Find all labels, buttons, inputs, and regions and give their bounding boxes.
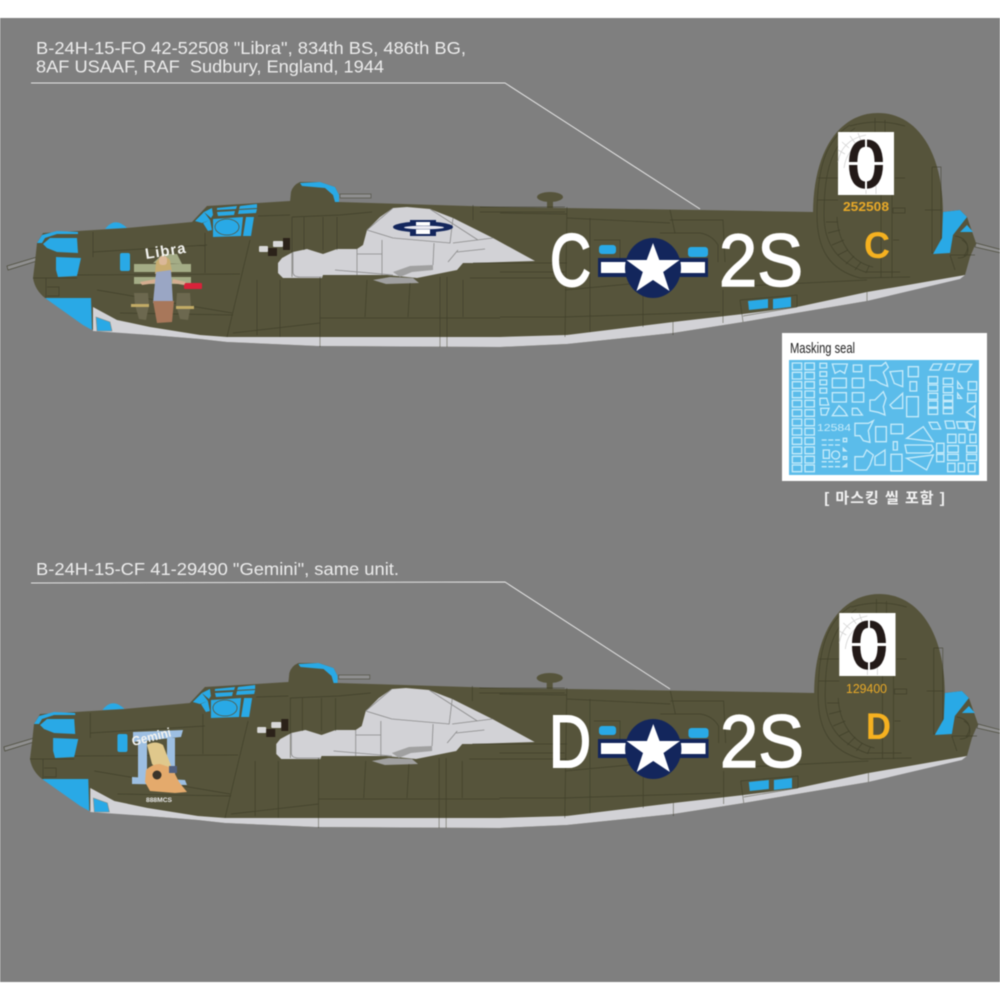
heading: Libra scheme: 8AF USAAF, RAF Sudbury, England, 1944 bbox=[36, 56, 384, 76]
leader line: Libra bbox=[31, 83, 700, 209]
wing insignia bbox=[393, 220, 453, 236]
aircraft: Libra B-24H bbox=[7, 113, 1000, 347]
masking seal title: Masking seal bbox=[790, 340, 855, 357]
masking seal shapes bbox=[792, 362, 977, 472]
tail letter D: D bbox=[866, 706, 891, 747]
aircraft: Gemini B-24H bbox=[4, 594, 1000, 828]
masking seal serial: 12584 bbox=[817, 423, 852, 434]
tail serial: 129400 bbox=[846, 681, 887, 696]
nose art: Gemini bbox=[132, 730, 187, 793]
nose art title: Libra: Libra bbox=[144, 240, 188, 263]
nose art title: Gemini: Gemini bbox=[130, 725, 173, 749]
tail letter C: C bbox=[864, 225, 890, 266]
heading: Gemini scheme: B-24H-15-CF 41-29490 "Gemini", same unit. bbox=[36, 559, 399, 579]
fuselage code 2S: 2S bbox=[719, 219, 803, 302]
tail number 0: 0 bbox=[848, 127, 884, 201]
caption: masking seal included: [ 마스킹 씰 포함 ] bbox=[824, 490, 946, 507]
fuselage code D: D bbox=[549, 700, 591, 783]
tail number 0: 0 bbox=[851, 608, 887, 682]
nose art: Libra bbox=[131, 254, 202, 323]
fuselage code 2S: 2S bbox=[720, 700, 804, 783]
tail serial: 252508 bbox=[843, 199, 889, 214]
heading: Libra scheme bbox=[36, 38, 466, 76]
heading: Libra scheme: B-24H-15-FO 42-52508 "Libra", 834th BS, 486th BG, bbox=[36, 38, 466, 58]
fuselage code C: C bbox=[550, 219, 591, 302]
masking seal panel bbox=[782, 333, 987, 481]
nose art squadron tag: 888MCS bbox=[146, 798, 172, 804]
leader line: Gemini bbox=[31, 582, 670, 689]
